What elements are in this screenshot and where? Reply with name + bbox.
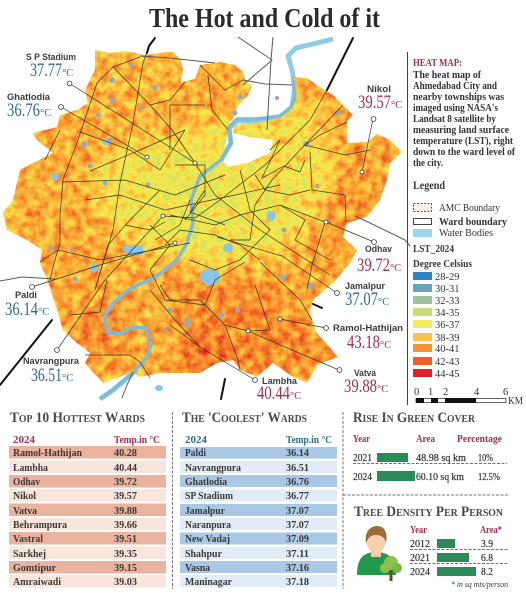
panel: heat map description: measuring land surface — [413, 125, 509, 136]
label: Jamalpur: °C — [378, 297, 389, 308]
label: Odhav: °C — [390, 263, 401, 274]
label: Ramol-Hathijan: °C — [380, 340, 391, 351]
label: Lambha: 40.44 — [257, 384, 290, 404]
label: Nikol: Nikol — [367, 84, 391, 94]
panel: heat map description: imaged using NASA's — [413, 103, 498, 114]
table: top 10 hottest wards: 40.28 — [114, 447, 137, 459]
panel: heat map description: the city. — [413, 158, 443, 169]
legend: Legend — [413, 180, 446, 192]
panel: tree density per person — [354, 504, 509, 589]
legend: 30-31 — [435, 284, 460, 295]
heat map — [0, 37, 410, 399]
table: coolest wards: Maninagar — [185, 576, 232, 588]
table: coolest wards: Vasna — [185, 562, 210, 574]
table: coolest wards: New Vadaj — [185, 533, 230, 545]
panel: heat map description: The heat map of — [413, 70, 481, 81]
label: Odhav — [357, 244, 401, 276]
table: top 10 hottest wards: 39.66 — [114, 519, 137, 531]
scale bar: 2 — [443, 387, 448, 398]
table: top 10 hottest wards: 2024 — [13, 435, 36, 446]
heat surface — [0, 40, 410, 390]
legend — [413, 180, 508, 380]
scale bar: 4 — [474, 387, 480, 398]
table: top 10 hottest wards: 39.35 — [114, 548, 137, 560]
label: Ghatlodia: 36.76 — [7, 101, 40, 121]
label: Vatva: 39.88 — [344, 377, 377, 397]
panel: rise in green cover: Year — [353, 434, 370, 445]
table: coolest wards: 37.07 — [286, 505, 309, 517]
label: Navrangpura — [23, 356, 80, 386]
label: Ghatlodia: °C — [40, 108, 51, 119]
label: Ghatlodia: Ghatlodia — [7, 92, 51, 102]
bar: 2024 green cover — [377, 471, 415, 481]
bar: 2021 — [437, 553, 469, 562]
bar: 2024 — [437, 567, 476, 576]
scale bar: 6 — [503, 387, 508, 398]
title: The Hot and Cold of it — [149, 3, 380, 33]
label: Odhav: 39.72 — [357, 256, 390, 276]
label: Navrangpura: °C — [62, 373, 73, 384]
legend: 36-37 — [435, 320, 460, 331]
label: Nikol — [358, 84, 402, 113]
table: coolest wards: 37.18 — [286, 576, 309, 588]
label: Jamalpur: 37.07 — [345, 290, 378, 310]
panel: rise in green cover: 2021 — [353, 453, 372, 464]
panel: heat map description: nearby townships was — [413, 92, 504, 103]
legend: 28-29 — [435, 272, 460, 283]
table: coolest wards: 36.76 — [286, 476, 309, 488]
label: Paldi: Paldi — [15, 290, 37, 300]
legend: LST_2024 — [413, 243, 454, 255]
legend: Ward boundary — [439, 217, 508, 228]
table: top 10 hottest wards: Nikol — [13, 490, 36, 502]
label: Navrangpura: Navrangpura — [23, 356, 80, 366]
legend: 32-33 — [435, 296, 460, 307]
panel: rise in green cover: 2024 — [353, 472, 373, 483]
panel: tree density per person: 3.9 — [481, 539, 493, 550]
water bodies — [51, 139, 276, 391]
label: Jamalpur — [345, 281, 389, 310]
table: coolest wards: 37.07 — [286, 519, 309, 531]
legend: Water Bodies — [439, 228, 493, 239]
table: top 10 hottest wards: 39.88 — [114, 505, 137, 517]
panel: rise in green cover: Area — [416, 434, 436, 445]
table: top 10 hottest wards: Lambha — [13, 462, 48, 474]
panel: heat map description: down to the ward level of — [413, 147, 515, 158]
label: Paldi: 36.14 — [5, 300, 38, 320]
small ponds — [48, 63, 340, 332]
table: top 10 hottest wards: Vatva — [13, 505, 37, 517]
table: coolest wards: Paldi — [185, 447, 206, 459]
table: coolest wards: 36.14 — [286, 447, 309, 459]
label: Jamalpur: Jamalpur — [345, 281, 385, 291]
label: Nikol: °C — [391, 100, 402, 111]
panel: heat map description: HEAT MAP: — [413, 58, 462, 69]
ward markers — [30, 81, 376, 382]
label: Vatva — [344, 368, 388, 397]
table: coolest wards: Ghatlodia — [185, 476, 227, 488]
panel: rise in green cover: 60.10 sq km — [416, 472, 464, 483]
label: Ghatlodia — [7, 92, 51, 121]
legend: 42-43 — [435, 357, 460, 368]
table: coolest wards: Shahpur — [185, 548, 222, 560]
label: Vatva: Vatva — [354, 368, 377, 378]
icon: person with tree — [357, 526, 402, 581]
panel: tree density per person: 8.2 — [481, 567, 493, 578]
label: Paldi: °C — [38, 307, 49, 318]
label: Odhav: Odhav — [365, 244, 392, 254]
label: Ramol-Hathijan: Ramol-Hathijan — [333, 323, 403, 333]
table: top 10 hottest wards: 40.44 — [114, 462, 137, 474]
label: Lambha — [257, 376, 301, 404]
panel: rise in green cover: Percentage — [457, 434, 502, 445]
panel: tree density per person: 6.8 — [481, 553, 493, 564]
bar: 2012 — [437, 539, 455, 548]
river upstream — [100, 39, 333, 399]
table: top 10 hottest wards: 39.51 — [114, 533, 137, 545]
table: top 10 hottest wards: Ramol-Hathijan — [13, 447, 82, 459]
panel: rise in green cover: 12.5% — [478, 472, 500, 483]
table: top 10 hottest wards: Gomtipur — [13, 562, 56, 574]
panel: tree density per person: * in sq mts/person — [451, 580, 508, 589]
table: coolest wards: 37.16 — [286, 562, 309, 574]
panel: tree density per person: 2021 — [410, 553, 430, 564]
label: Lambha: Lambha — [262, 376, 298, 386]
ward boundaries — [32, 52, 374, 380]
table: top 10 hottest wards: 39.03 — [114, 576, 137, 588]
label: Paldi — [5, 290, 49, 320]
table: top 10 hottest wards: Top 10 Hottest Wards — [10, 410, 145, 426]
label: S P Stadium — [26, 52, 76, 81]
table: coolest wards: 36.51 — [286, 462, 309, 474]
outer roads — [0, 37, 410, 398]
scale bar — [414, 387, 524, 407]
panel: rise in green cover: 48.98 sq km — [416, 453, 466, 464]
table: coolest wards: SP Stadium — [185, 490, 233, 502]
table: coolest wards: Navrangpura — [185, 462, 241, 474]
legend: 40-41 — [435, 344, 460, 355]
legend: 34-35 — [435, 308, 460, 319]
panel: rise in green cover: Rise In Green Cover — [353, 410, 476, 426]
table: top 10 hottest wards: Temp.in °C — [114, 435, 160, 446]
legend: Degree Celsius — [413, 259, 472, 270]
scale bar: 0 — [414, 387, 419, 398]
label: Ramol-Hathijan — [333, 323, 403, 353]
legend: 38-39 — [435, 333, 460, 344]
table: top 10 hottest wards: Vastral — [13, 533, 43, 545]
panel: heat map description: Ahmedabad City and — [413, 81, 497, 92]
table: top 10 hottest wards: Amraiwadi — [13, 576, 61, 588]
table: top 10 hottest wards: 39.15 — [114, 562, 137, 574]
table: coolest wards — [180, 410, 337, 588]
scale bar: KM — [508, 396, 524, 407]
table: coolest wards: 36.77 — [286, 490, 309, 502]
table: coolest wards: 37.11 — [286, 548, 309, 560]
major road segments — [0, 38, 353, 399]
table: top 10 hottest wards: Odhav — [13, 476, 40, 488]
table: top 10 hottest wards: Sarkhej — [13, 548, 46, 560]
bar: 2021 green cover — [377, 453, 408, 462]
label: S P Stadium: S P Stadium — [26, 52, 76, 62]
label: Lambha: °C — [290, 391, 301, 402]
table: coolest wards: Jamalpur — [185, 505, 225, 517]
table: top 10 hottest wards: 39.57 — [114, 490, 137, 502]
table: top 10 hottest wards — [9, 410, 166, 588]
panel: tree density per person: 2024 — [410, 567, 431, 578]
table: top 10 hottest wards: 39.72 — [114, 476, 137, 488]
label: Navrangpura: 36.51 — [31, 366, 62, 386]
table: coolest wards: 2024 — [185, 435, 208, 446]
label: Ramol-Hathijan: 43.18 — [347, 333, 380, 353]
table: coolest wards: The 'Coolest' Wards — [182, 410, 307, 426]
label: S P Stadium: 37.77 — [30, 61, 62, 81]
table: coolest wards: Naranpura — [185, 519, 231, 531]
label: Nikol: 39.57 — [358, 93, 391, 113]
panel: heat map description: Landsat 8 satellite by — [413, 114, 497, 125]
panel: rise in green cover: 10% — [478, 453, 493, 464]
table: top 10 hottest wards: Behrampura — [13, 519, 67, 531]
scale bar: 1 — [428, 387, 433, 398]
panel: heat map description — [408, 52, 515, 405]
panel: rise in green cover — [353, 410, 507, 483]
panel: tree density per person: Area* — [480, 525, 502, 536]
river in city — [100, 80, 295, 399]
panel: tree density per person: Year — [410, 525, 427, 536]
label: Vatva: °C — [377, 384, 388, 395]
legend: 44-45 — [435, 369, 460, 380]
legend: AMC Boundary — [439, 203, 501, 214]
table: coolest wards: Temp.in °C — [286, 435, 332, 446]
table: coolest wards: 37.09 — [286, 533, 309, 545]
label: S P Stadium: °C — [62, 68, 73, 79]
panel: tree density per person: Tree Density Per Person — [354, 504, 503, 520]
panel: tree density per person: 2012 — [410, 539, 430, 550]
panel: heat map description: temperature (LST), right — [413, 136, 513, 147]
